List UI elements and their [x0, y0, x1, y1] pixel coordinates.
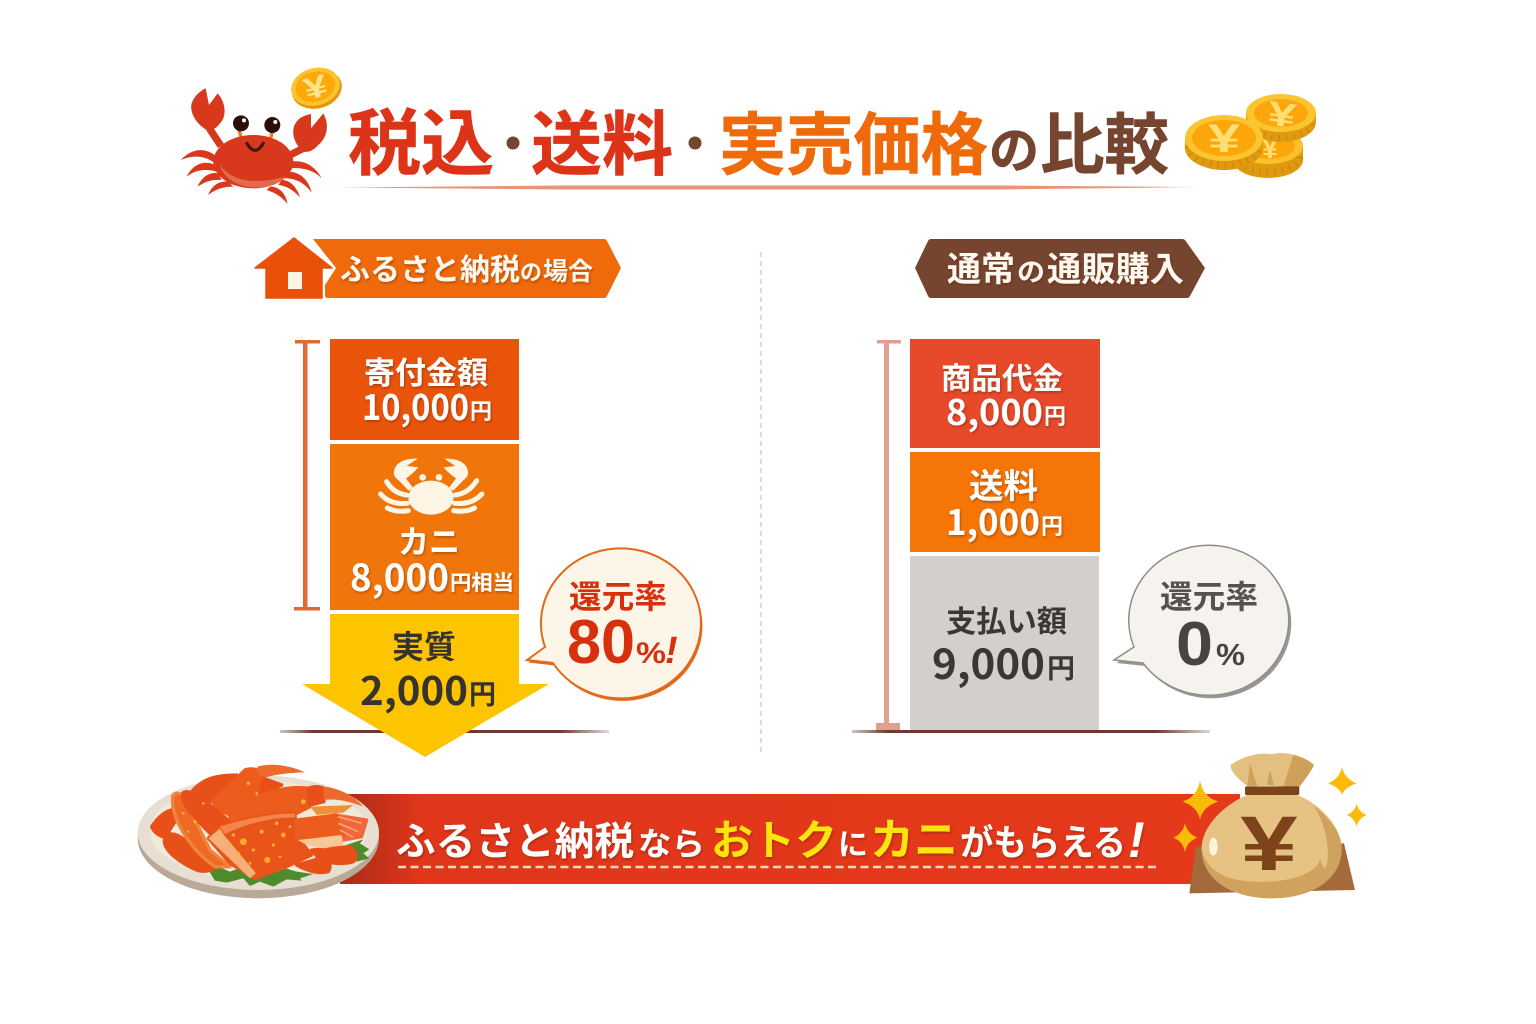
banner: !: [1128, 812, 1145, 868]
ribbon: furusato nozei: の: [520, 255, 542, 287]
box: shipping: 送料: [969, 459, 1038, 508]
callout: 80% return: %: [636, 637, 666, 670]
title: 税込: [348, 85, 494, 190]
banner: ふるさと納税: [396, 811, 634, 867]
illustration: money bag: ¥: [1240, 801, 1298, 887]
ribbon: furusato nozei: [313, 239, 621, 298]
icon: red crab with coin: ¥: [300, 68, 331, 107]
callout: 80% return: !: [665, 630, 678, 672]
box: crab value: カニ: [398, 517, 460, 563]
box: shipping: 1,000: [946, 495, 1040, 546]
banner: [340, 794, 1240, 884]
arrow: actual cost: 円: [469, 673, 496, 712]
banner: なら: [638, 819, 705, 865]
box: donation amount: 円: [470, 394, 492, 426]
icon: gold coins: ¥: [1208, 117, 1241, 161]
ribbon: regular mail order: 通販購入: [1047, 242, 1184, 291]
ribbon: regular mail order: の: [1017, 252, 1045, 289]
bracket: left total: [294, 340, 320, 610]
ribbon: regular mail order: 通常: [947, 242, 1015, 291]
box: payment total: 9,000: [932, 631, 1045, 691]
box: product price: 商品代金: [941, 354, 1063, 398]
illustration: money bag: [1173, 753, 1367, 898]
right baseline: [852, 730, 1210, 733]
icon: house: [255, 238, 332, 298]
icon: gold coins: [1185, 94, 1316, 178]
ribbon: furusato nozei: ふるさと納税: [340, 245, 520, 289]
box: payment total: 支払い額: [946, 597, 1067, 641]
box: donation amount: 10,000: [362, 380, 469, 431]
callout: 80% return: 80: [567, 608, 635, 677]
icon: white crab: [381, 459, 482, 515]
box: product price: 円: [1044, 399, 1066, 431]
title: 実売価格: [719, 90, 988, 189]
banner: に: [838, 820, 868, 864]
box: shipping: 円: [1041, 509, 1063, 541]
icon: red crab with coin: [181, 62, 346, 204]
box: product price: [910, 339, 1100, 448]
callout: 0% return: [1114, 545, 1291, 698]
banner: がもらえる: [960, 814, 1126, 866]
title: 比較: [1040, 92, 1169, 188]
sparkles: [1173, 767, 1367, 852]
callout: 0% return: %: [1216, 637, 1245, 672]
callout: 80% return: [527, 548, 702, 701]
arrow: actual cost: 実質: [392, 622, 456, 668]
ribbon: regular mail order: [915, 239, 1205, 298]
icon: gold coins: ¥: [1265, 94, 1298, 136]
box: donation amount: [330, 339, 519, 440]
title: [348, 85, 1169, 190]
box: crab value: 8,000: [350, 548, 449, 602]
box: payment total: [910, 556, 1099, 730]
banner: カニ: [870, 804, 958, 868]
arrow: actual cost: [302, 614, 549, 757]
box: payment total: 円: [1047, 647, 1075, 686]
banner: おトク: [711, 807, 837, 868]
box: crab value: [330, 444, 519, 610]
title: の: [989, 111, 1039, 183]
callout: 0% return: 0: [1176, 610, 1213, 679]
box: shipping: [910, 452, 1100, 552]
title: 送料: [531, 89, 673, 190]
illustration: crab plate: [138, 765, 379, 898]
box: product price: 8,000: [946, 385, 1043, 436]
bracket: right total: [876, 340, 901, 731]
left baseline: [280, 730, 609, 733]
arrow: actual cost: 2,000: [360, 661, 468, 717]
callout: 80% return: 還元率: [569, 572, 667, 618]
box: donation amount: 寄付金額: [364, 348, 488, 393]
icon: gold coins: ¥: [1262, 133, 1278, 164]
callout: 0% return: 還元率: [1160, 572, 1258, 618]
box: crab value: 円相当: [450, 567, 514, 597]
title underline: [335, 186, 1200, 190]
ribbon: furusato nozei: 場合: [543, 252, 593, 288]
